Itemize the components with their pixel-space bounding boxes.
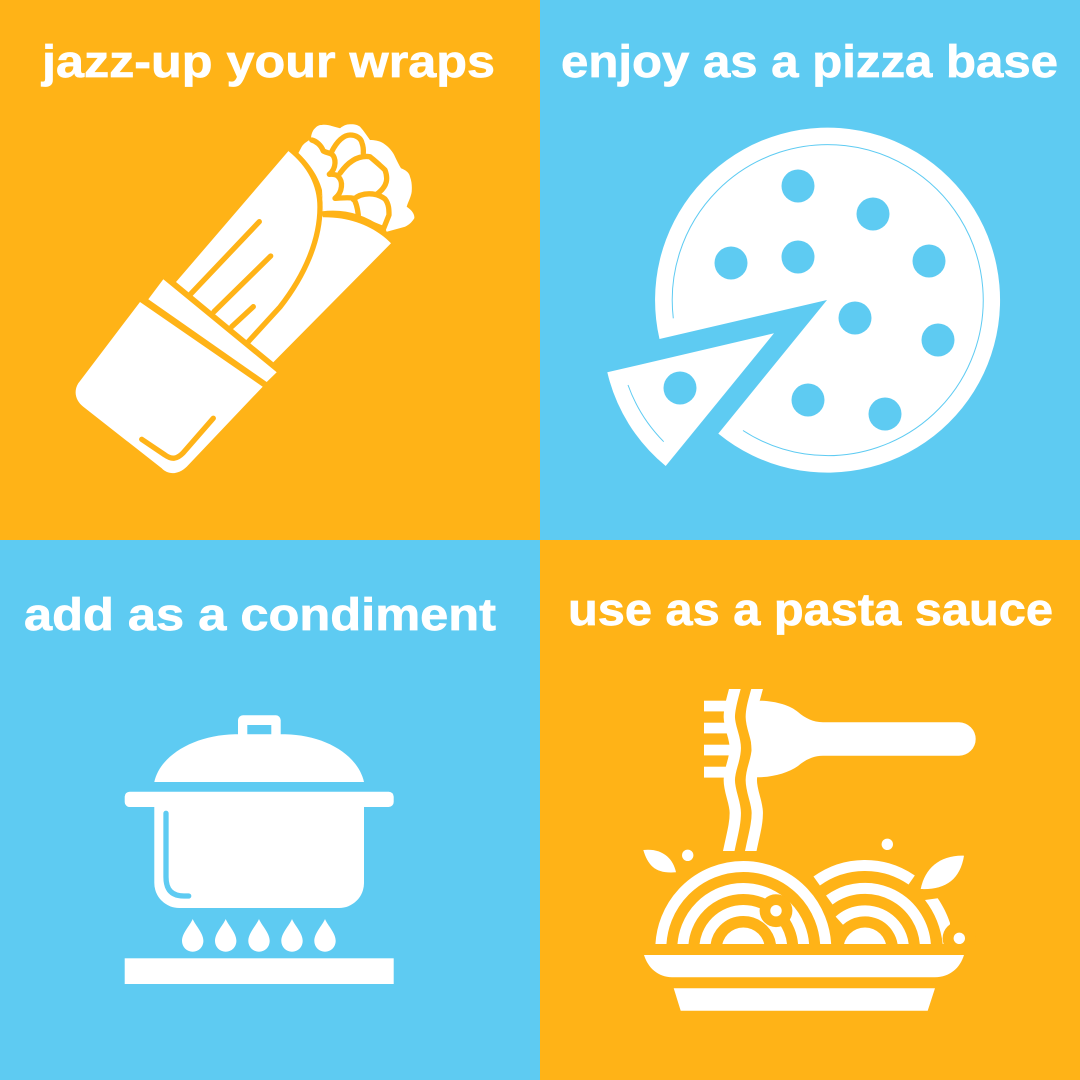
panel: pizza <box>540 0 1080 540</box>
heading: wraps: jazz-up your wraps <box>41 36 495 87</box>
icon: pot on burner <box>125 715 394 984</box>
panel: condiment <box>0 540 540 1080</box>
icon: wrap <box>76 124 414 473</box>
panel: pasta <box>570 595 1052 1011</box>
icon: pizza <box>607 128 1000 473</box>
icon: pasta with fork <box>643 680 976 1032</box>
heading: pizza: enjoy as a pizza base <box>561 36 1058 87</box>
panel: wraps <box>0 0 540 540</box>
heading: condiment: add as a condiment <box>24 589 496 640</box>
heading: pasta: use as a pasta sauce <box>568 584 1053 635</box>
